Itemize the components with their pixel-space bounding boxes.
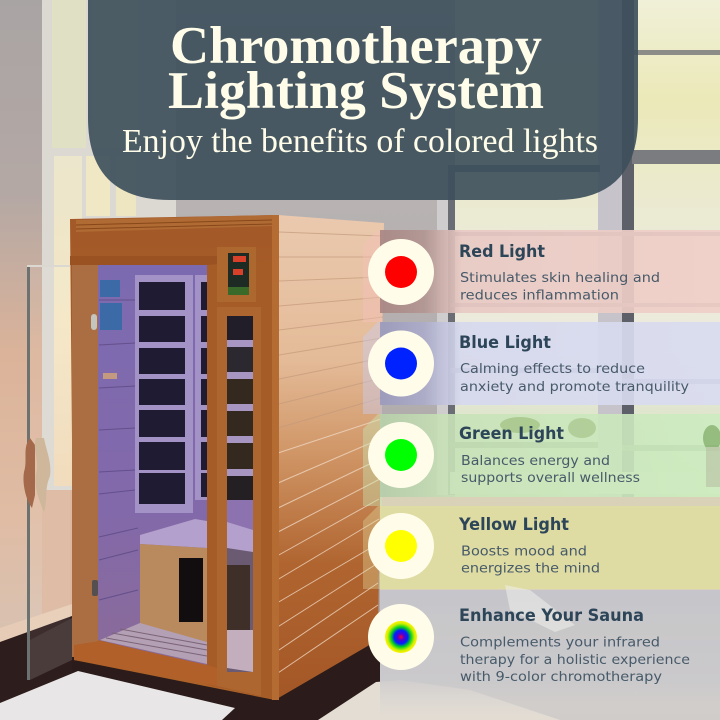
sauna front frame (70, 215, 278, 700)
icon: blue light (368, 330, 434, 396)
door window frame (217, 307, 261, 696)
description: yellow light: energizes the mind (461, 560, 600, 576)
panel: yellow light band (363, 506, 720, 632)
panel: title banner (88, 0, 638, 200)
plants seen through the green band (500, 417, 720, 487)
overlay haze (380, 590, 720, 720)
description: green light: supports overall wellness (461, 470, 640, 486)
description: blue light: Calming effects to reduce (460, 361, 645, 377)
description: red light: reduces inflammation (460, 288, 619, 304)
subtitle: Enjoy the benefits of colored lights (122, 123, 598, 160)
description: blue light (460, 361, 689, 395)
description: enhance your sauna: Complements your infrared (460, 634, 660, 650)
rug left (0, 671, 235, 720)
description: blue light: anxiety and promote tranquility (460, 379, 689, 395)
sauna cabin (70, 215, 384, 700)
description: enhance your sauna: therapy for a holistic experience (460, 652, 690, 668)
sauna header moulding (70, 215, 279, 700)
description: enhance your sauna (460, 634, 690, 685)
description: enhance your sauna: with 9-color chromotherapy (460, 669, 662, 685)
description: red light (460, 270, 660, 304)
icon: rainbow light (368, 604, 434, 670)
bottom frame (74, 641, 217, 686)
panel: enhance your sauna (368, 604, 690, 685)
sauna interior (98, 265, 207, 666)
icon: green light (368, 422, 434, 488)
panel: green light band (363, 414, 720, 506)
panel: blue light band (363, 322, 720, 414)
glass-covered left post (72, 265, 98, 657)
door glass pane (227, 316, 253, 672)
heading: green light: Green Light (459, 424, 564, 444)
door latch (92, 580, 98, 596)
rug right (318, 680, 560, 720)
title: Lighting System (168, 62, 544, 120)
door handle bracket (91, 314, 97, 330)
heading: yellow light: Yellow Light (458, 515, 569, 535)
description: yellow light (461, 544, 600, 576)
title: Chromotherapy (170, 17, 542, 75)
icon: yellow light (368, 513, 434, 579)
icon: red light (368, 239, 434, 305)
description: green light: Balances energy and (461, 453, 610, 469)
description: green light (461, 453, 640, 486)
description: yellow light: Boosts mood and (461, 544, 587, 560)
description: red light: Stimulates skin healing and (460, 270, 660, 286)
sauna right side (275, 215, 384, 700)
heading: blue light: Blue Light (459, 333, 551, 353)
heading: red light: Red Light (459, 242, 545, 262)
panel: red light band (363, 230, 720, 322)
title (168, 17, 544, 120)
control panel (217, 247, 256, 302)
heading: enhance your sauna: Enhance Your Sauna (459, 606, 644, 626)
door stile (207, 260, 272, 699)
towel bucket seen through the bands (505, 585, 575, 632)
glass door with handle (23, 265, 72, 680)
